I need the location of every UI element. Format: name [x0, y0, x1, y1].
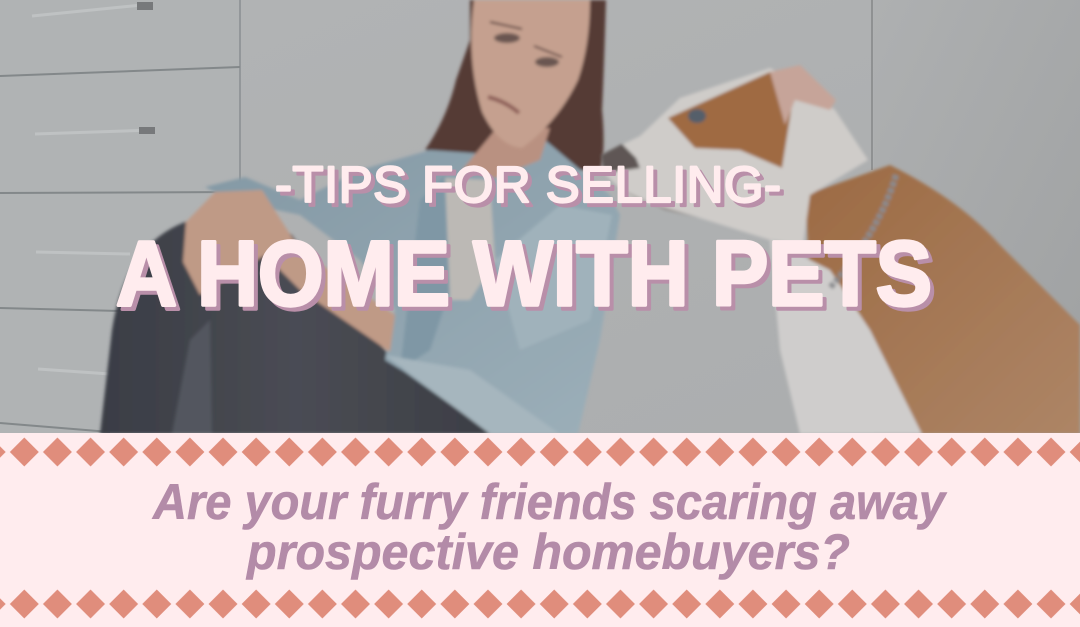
neck — [462, 128, 550, 178]
jeans legs — [100, 216, 492, 434]
hair — [425, 0, 606, 172]
wall — [0, 0, 1080, 434]
woman — [100, 0, 620, 434]
t-shirt — [445, 178, 495, 300]
background photo: woman and dog — [0, 0, 1080, 434]
face — [471, 0, 590, 148]
heading: a home with pets: A HOME WITH PETS — [116, 223, 932, 325]
diamond border: bottom — [0, 589, 1080, 619]
heading: tips for selling: -TIPS FOR SELLING- — [275, 156, 781, 213]
head brown patch — [668, 72, 792, 168]
heading: tips for selling: -TIPS FOR SELLING- — [279, 160, 785, 217]
diamond border: top — [0, 437, 1080, 467]
hands and forearm — [183, 190, 395, 352]
ear — [770, 65, 836, 125]
subheading question: prospective homebuyers? — [245, 524, 850, 580]
muzzle — [601, 144, 640, 172]
collar chain — [830, 175, 896, 288]
cabinet drawers — [0, 0, 241, 434]
subheading question — [151, 474, 947, 580]
dog — [601, 65, 1080, 434]
heading: a home with pets: A HOME WITH PETS — [120, 227, 936, 329]
denim shirt — [205, 140, 620, 434]
head white — [601, 68, 868, 245]
white chest — [770, 240, 922, 434]
subheading question: Are your furry friends scaring away — [151, 474, 947, 530]
bottom panel — [0, 433, 1080, 627]
eye — [688, 109, 706, 123]
body brown — [805, 165, 1080, 434]
